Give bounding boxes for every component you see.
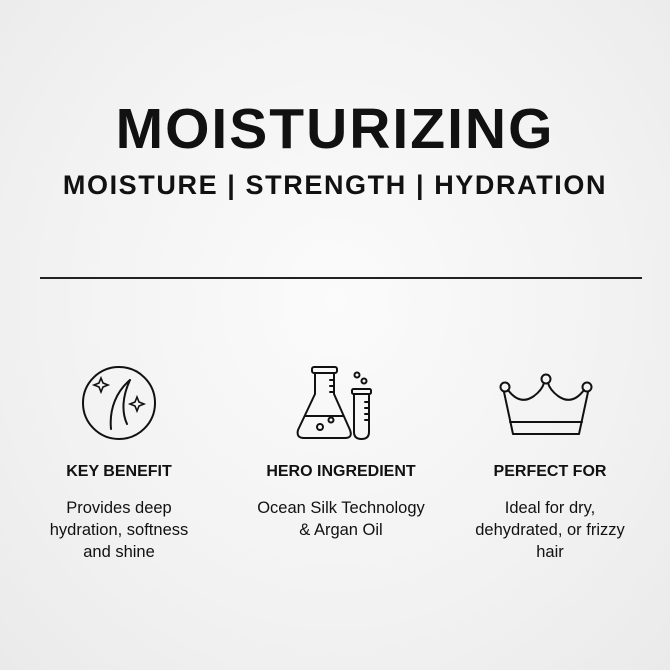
divider	[40, 277, 642, 278]
icon: flask	[296, 366, 372, 440]
text: key benefit: and shine	[83, 543, 155, 561]
icon: hair shine	[82, 366, 156, 440]
subtitle: MOISTURE | STRENGTH | HYDRATION	[63, 170, 607, 200]
text: hero ingredient: & Argan Oil	[299, 521, 383, 539]
text: key benefit: Provides deep	[66, 499, 172, 517]
text: perfect for: Ideal for dry,	[505, 499, 595, 517]
text: key benefit	[50, 499, 188, 561]
text: perfect for: dehydrated, or frizzy	[475, 521, 625, 539]
icon: crown	[500, 374, 592, 435]
text: perfect for	[475, 499, 625, 561]
text: hero ingredient: Ocean Silk Technology	[257, 499, 425, 517]
text: hero ingredient	[257, 499, 425, 539]
heading: hero ingredient: HERO INGREDIENT	[266, 463, 416, 480]
text: key benefit: hydration, softness	[50, 521, 188, 539]
heading: key benefit: KEY BENEFIT	[66, 463, 172, 480]
text: perfect for: hair	[536, 543, 564, 561]
heading: perfect for: PERFECT FOR	[494, 463, 606, 480]
title: MOISTURIZING	[116, 97, 554, 161]
